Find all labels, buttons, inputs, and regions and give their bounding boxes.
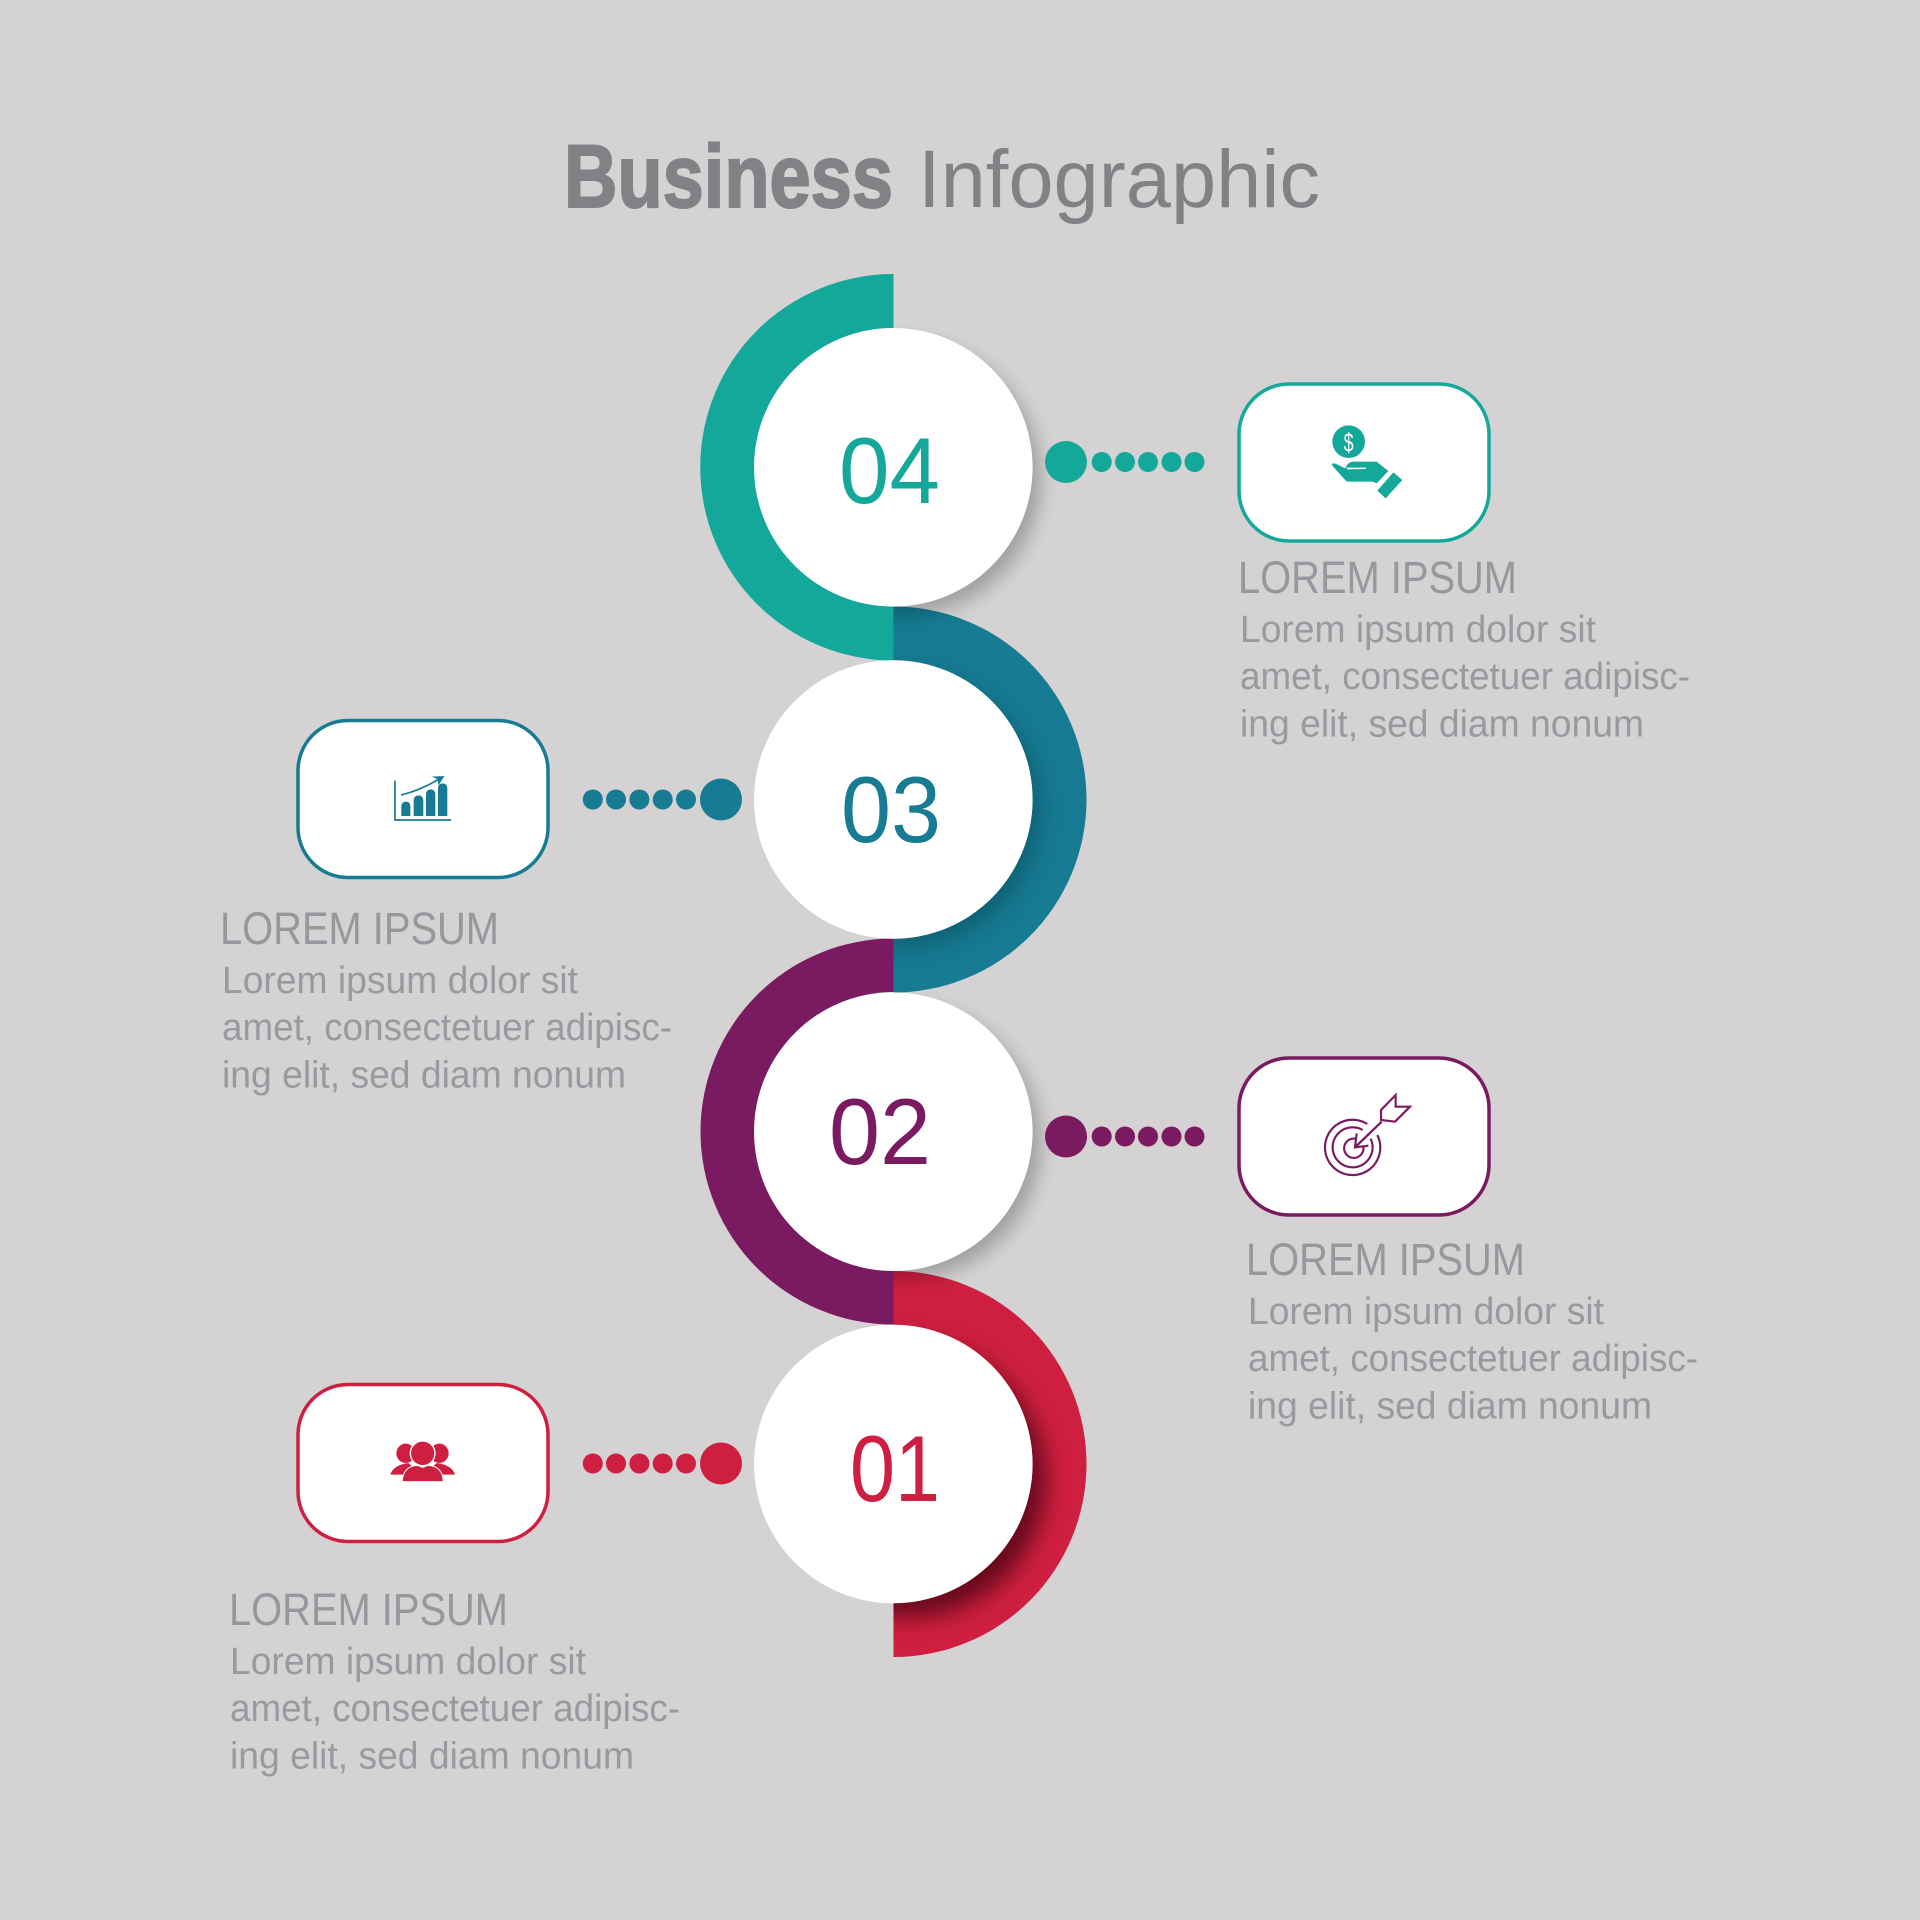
step 03 circle <box>754 660 1033 939</box>
text block 01: amet, consectetuer adipisc- <box>230 1688 680 1730</box>
text block 02: amet, consectetuer adipisc- <box>1248 1338 1698 1380</box>
icon: money in hand <box>1332 425 1402 498</box>
text block 02: ing elit, sed diam nonum <box>1248 1386 1652 1428</box>
text block 01: Lorem ipsum dolor sit <box>230 1641 586 1683</box>
step 04 circle <box>754 328 1033 607</box>
icon: bar chart <box>395 776 451 820</box>
connector dots 01 <box>583 1442 742 1484</box>
text block 04 <box>1238 552 1690 746</box>
arc 03 blue <box>894 606 1086 992</box>
text block 01: ing elit, sed diam nonum <box>230 1736 634 1778</box>
text block 04: ing elit, sed diam nonum <box>1240 704 1644 746</box>
step 04 circle: 04 <box>839 418 940 523</box>
connector dots 03 <box>583 778 742 820</box>
text block 02: Lorem ipsum dolor sit <box>1248 1291 1604 1333</box>
step 01 circle <box>754 1325 1033 1603</box>
step 03 circle: 03 <box>841 757 941 862</box>
text block 03 <box>220 903 672 1096</box>
icon box 02 <box>1239 1058 1489 1215</box>
arc 01 red <box>894 1271 1086 1657</box>
text block 03: Lorem ipsum dolor sit <box>222 960 578 1002</box>
text block 03: ing elit, sed diam nonum <box>222 1054 626 1096</box>
title <box>564 126 1320 226</box>
step 02 circle <box>754 992 1033 1271</box>
step 02 circle: 02 <box>829 1079 931 1184</box>
text block 02 <box>1246 1234 1698 1428</box>
arc 02 purple <box>700 938 894 1324</box>
icon: money in hand: $ <box>1344 427 1354 457</box>
connector dots 02 <box>1045 1116 1204 1158</box>
text block 04: amet, consectetuer adipisc- <box>1240 656 1690 698</box>
text block 03: amet, consectetuer adipisc- <box>222 1007 672 1049</box>
connector dots 04 <box>1045 441 1204 483</box>
text block 04: Lorem ipsum dolor sit <box>1240 609 1596 651</box>
icon box 01 <box>298 1384 548 1542</box>
icon box 04 <box>1239 384 1489 541</box>
arc 04 teal <box>700 274 894 660</box>
icon box 03 <box>298 720 548 878</box>
step 01 circle: 01 <box>850 1416 940 1521</box>
icon: people <box>390 1441 455 1482</box>
text block 01 <box>229 1584 680 1778</box>
circle shadows <box>894 341 1061 1633</box>
title: Infographic <box>918 134 1320 225</box>
text block 03: LOREM IPSUM <box>220 903 499 954</box>
title: Business <box>564 126 893 226</box>
text block 02: LOREM IPSUM <box>1246 1234 1525 1285</box>
icon: target with arrow <box>1325 1095 1410 1175</box>
text block 04: LOREM IPSUM <box>1238 552 1517 603</box>
text block 01: LOREM IPSUM <box>229 1584 508 1635</box>
